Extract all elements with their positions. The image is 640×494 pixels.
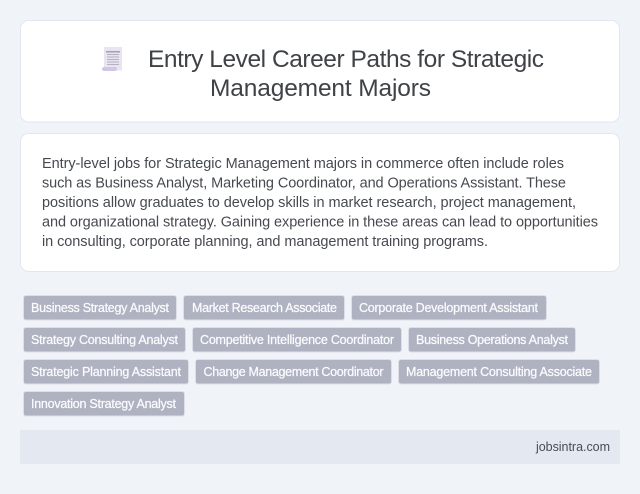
tag: Strategic Planning Assistant (24, 360, 188, 384)
tag: Business Strategy Analyst: Business Strategy Analyst (31, 301, 170, 315)
text block: description: in consulting, corporate planning, and management training programs. (42, 234, 488, 250)
footer source text: jobsintra.com (535, 440, 610, 454)
title (148, 46, 544, 102)
tag: Strategic Planning Assistant: Strategic Planning Assistant (31, 365, 182, 379)
tag: Business Operations Analyst: Business Operations Analyst (416, 333, 569, 347)
title: Management Majors (210, 75, 431, 102)
text block: description: Entry-level jobs for Strategic Management majors in commerce often include roles (42, 156, 564, 172)
icon: document scroll (102, 47, 122, 71)
tag: Strategy Consulting Analyst (24, 328, 186, 352)
tag: Innovation Strategy Analyst (24, 392, 184, 416)
panel: description (20, 134, 620, 272)
tag: Business Operations Analyst (408, 328, 576, 352)
tag: Competitive Intelligence Coordinator: Competitive Intelligence Coordinator (200, 333, 394, 347)
tag: Competitive Intelligence Coordinator (192, 328, 402, 352)
tag: Innovation Strategy Analyst: Innovation Strategy Analyst (31, 397, 177, 411)
tag: Management Consulting Associate: Management Consulting Associate (406, 365, 592, 379)
tag list (24, 296, 600, 416)
text block: description: such as Business Analyst, Marketing Coordinator, and Operations Assistant. These (42, 176, 566, 192)
panel: header (20, 20, 620, 122)
text block: description (42, 156, 598, 250)
tag: Change Management Coordinator (196, 360, 392, 384)
tag: Change Management Coordinator: Change Management Coordinator (204, 365, 384, 379)
tag: Market Research Associate: Market Research Associate (192, 301, 337, 315)
tag: Corporate Development Assistant (352, 296, 546, 320)
text block: description: and organizational strategy. Gaining experience in these areas can lead to opportunities (42, 214, 598, 230)
tag: Strategy Consulting Analyst: Strategy Consulting Analyst (31, 333, 179, 347)
tag: Corporate Development Assistant: Corporate Development Assistant (359, 301, 539, 315)
tag: Business Strategy Analyst (24, 296, 176, 320)
title: Entry Level Career Paths for Strategic (148, 46, 544, 73)
tag: Market Research Associate (184, 296, 344, 320)
text block: description: positions allow graduates to develop skills in market research, project management, (42, 195, 576, 211)
footer bar (20, 430, 620, 464)
tag: Management Consulting Associate (398, 360, 600, 384)
